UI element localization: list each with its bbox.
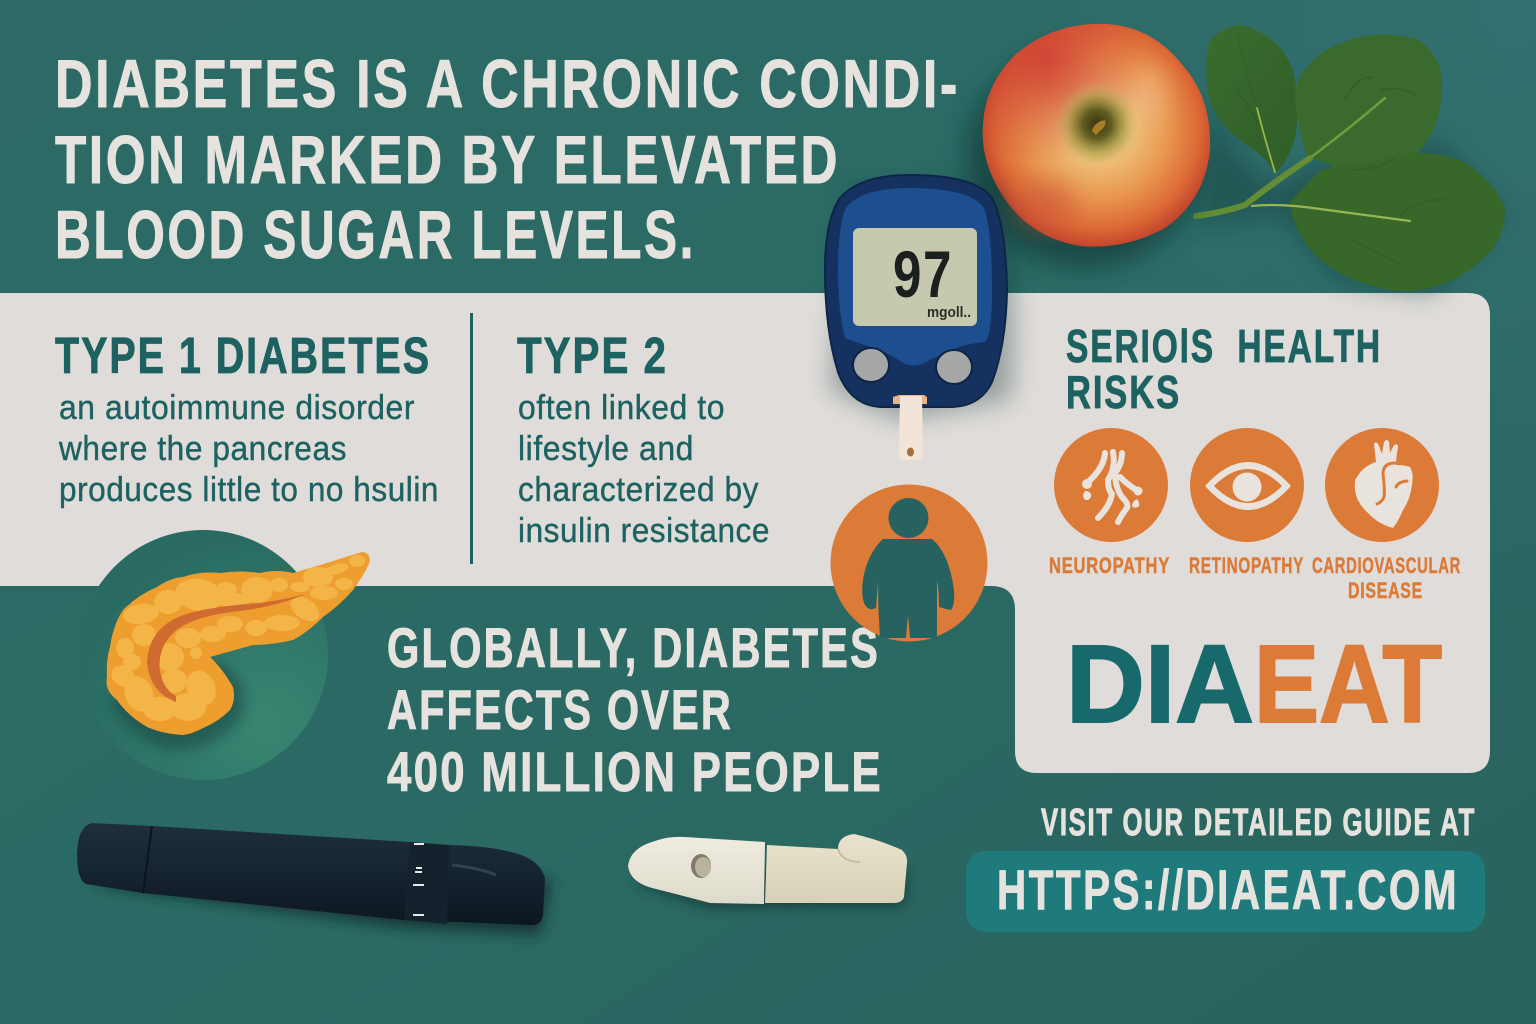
heading: serious health risks: SERIOlS HEALTH (1066, 320, 1382, 372)
text: type 2 description: lifestyle and (518, 430, 694, 468)
heading: type 2: TYPE 2 (517, 327, 668, 384)
text: type 1 description (58, 389, 439, 509)
text: global prevalence (387, 616, 883, 803)
panel: type 1 diabetes (55, 327, 439, 509)
icon: cardiovascular heart (1325, 428, 1439, 542)
button: website url (966, 851, 1485, 932)
icon: lancet cap (628, 834, 908, 908)
labels: risk names (1049, 553, 1461, 603)
meter buttons (853, 348, 972, 384)
title (55, 46, 960, 273)
meter screen (853, 228, 977, 326)
heading: serious health risks (1066, 320, 1382, 418)
labels: risk names: DISEASE (1348, 578, 1423, 603)
logo: DIAEAT: DIA (1066, 623, 1254, 746)
text: type 1 description: an autoimmune disorder (59, 389, 415, 427)
icon: person in orange circle (830, 484, 988, 642)
icon: spinach leaves (1196, 25, 1505, 295)
text: type 1 description: where the pancreas (58, 430, 347, 468)
labels: risk names: NEUROPATHY (1049, 553, 1170, 578)
leaf: top left (1206, 25, 1297, 173)
meter screen: mgoll.. (927, 304, 971, 321)
labels: risk names: RETINOPATHY (1189, 553, 1304, 578)
heading: serious health risks: RISKS (1066, 366, 1181, 418)
panel: type 2 diabetes (517, 327, 770, 550)
text: type 1 description: produces little to no hsulin (59, 471, 439, 509)
meter screen: 97 (893, 237, 953, 311)
test strip (893, 395, 927, 460)
text: type 2 description (518, 389, 770, 550)
heading: type 1: TYPE 1 DIABETES (55, 327, 431, 384)
icon: neuropathy (1054, 428, 1168, 542)
icon: pancreas on circle (78, 530, 370, 780)
title: DIABETES IS A CHRONIC CONDI- (55, 46, 960, 122)
title: BLOOD SUGAR LEVELS. (55, 197, 696, 273)
text: global prevalence: GLOBALLY, DIABETES (387, 616, 880, 679)
text: type 2 description: insulin resistance (518, 512, 770, 550)
labels: risk names: CARDIOVASCULAR (1312, 553, 1461, 578)
text: type 2 description: characterized by (518, 471, 759, 509)
leaf: bottom right (1289, 153, 1505, 291)
logo: DIAEAT: EAT (1254, 623, 1442, 746)
leaf veins and stem (1196, 32, 1410, 221)
meter body (825, 175, 1007, 407)
icon: lancet pen (77, 823, 552, 935)
title: TION MARKED BY ELEVATED (55, 122, 840, 198)
light content panel (0, 293, 1490, 773)
icon: apple (966, 24, 1210, 268)
text: global prevalence: AFFECTS OVER (387, 678, 733, 741)
logo: DIAEAT (1066, 623, 1442, 746)
leaf: top right (1295, 35, 1442, 180)
icon: glucose meter (825, 175, 1013, 460)
icon: retinopathy (1190, 428, 1304, 542)
text: type 2 description: often linked to (518, 389, 725, 427)
text: global prevalence: 400 MILLION PEOPLE (387, 740, 883, 803)
